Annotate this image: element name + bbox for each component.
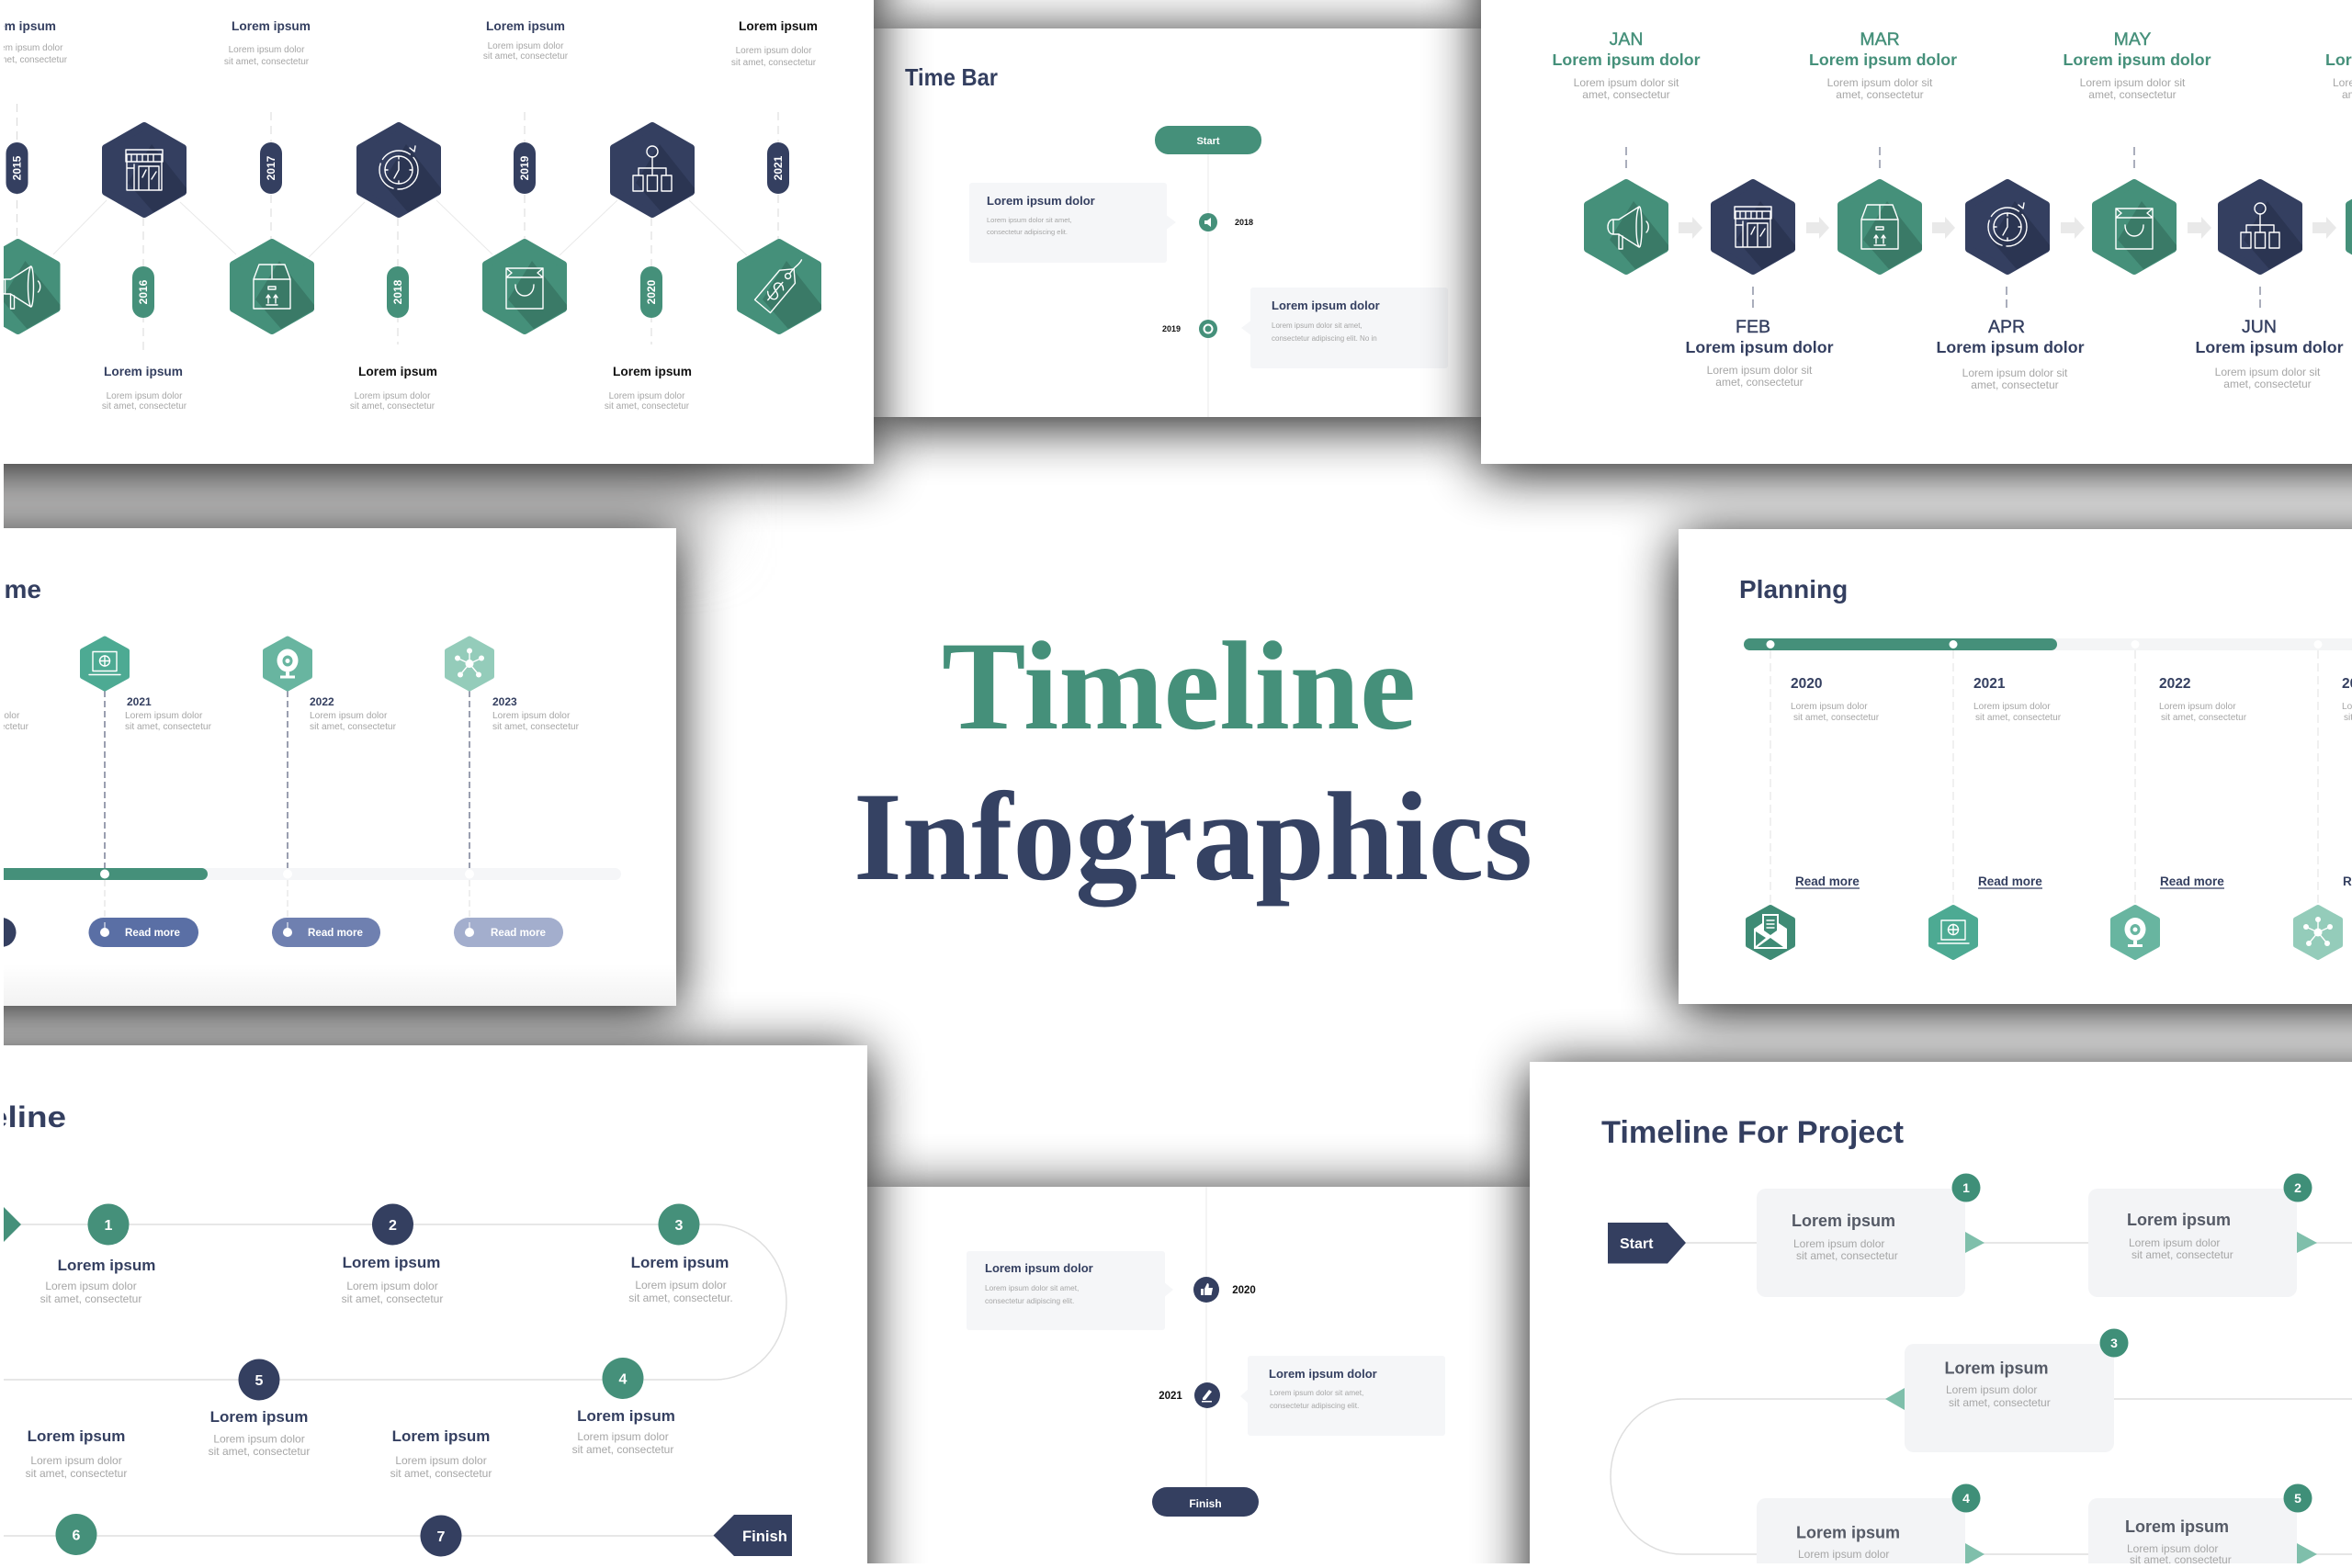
band: grey gap between top and middle slides bbox=[0, 446, 717, 548]
step 1 bbox=[40, 1203, 155, 1305]
bottom labels: Lorem ipsum bbox=[613, 365, 692, 378]
card: 2021: Lorem ipsum dolor sit amet, bbox=[1270, 1388, 1363, 1397]
step 5: sit amet, consectetur bbox=[209, 1445, 310, 1458]
hexagon: org chart bbox=[2222, 183, 2302, 271]
card 4 bbox=[1757, 1484, 1984, 1565]
panel: snake timeline bbox=[0, 1045, 867, 1563]
card 1: 1 bbox=[1962, 1180, 1970, 1195]
label: JUN bbox=[2195, 317, 2344, 390]
card: 2020: consectetur adipiscing elit. bbox=[985, 1296, 1074, 1305]
step 3: 3 bbox=[675, 1218, 684, 1234]
top labels: sit amet, consectetur bbox=[224, 57, 310, 67]
step 4: sit amet, consectetur bbox=[572, 1443, 673, 1456]
panel: monthly hexagon timeline bbox=[1481, 0, 2352, 464]
card 2 bbox=[2088, 1174, 2317, 1297]
step 6: Lorem ipsum dolor bbox=[30, 1454, 122, 1467]
column: 2021: Read more bbox=[1978, 874, 2042, 888]
card 5: Lorem ipsum bbox=[2125, 1517, 2229, 1536]
step 3: sit amet, consectetur. bbox=[628, 1292, 733, 1304]
card: 2019: Lorem ipsum dolor sit amet, bbox=[1272, 321, 1363, 330]
button: read more 2 bbox=[272, 918, 380, 947]
button: cropped bbox=[0, 918, 17, 947]
column: 2022: 2022 bbox=[2159, 676, 2190, 692]
top labels: Lorem ipsum dolor bbox=[736, 46, 812, 56]
start pill bbox=[1155, 126, 1261, 154]
progress bar bbox=[1744, 638, 2352, 650]
label: APR: Lorem ipsum dolor sit bbox=[1962, 367, 2068, 379]
card 4: Lorem ipsum dolor bbox=[1798, 1548, 1889, 1561]
panel: bottom centre slide bbox=[867, 1187, 1530, 1563]
start flag bbox=[1608, 1223, 1686, 1264]
card 2: sit amet, consectetur bbox=[2132, 1248, 2233, 1261]
top labels: Lorem ipsum dolor bbox=[229, 45, 305, 55]
column: 2020: 2020 bbox=[1791, 676, 1822, 692]
card: 2018: Lorem ipsum dolor bbox=[987, 194, 1095, 208]
step 7: 7 bbox=[437, 1529, 446, 1545]
card: 2021 bbox=[1240, 1356, 1445, 1436]
year pills: 2020 bbox=[645, 279, 658, 304]
column: 2022: Lorem ipsum dolor bbox=[2159, 702, 2236, 712]
card 3: sit amet, consectetur bbox=[1949, 1396, 2051, 1409]
bottom labels: Lorem ipsum dolor bbox=[107, 391, 183, 401]
heading: time bar: Time Bar bbox=[905, 63, 998, 91]
label: MAR: Lorem ipsum dolor sit bbox=[1827, 76, 1933, 89]
hexagon: network bbox=[447, 638, 492, 689]
label: 2021 bbox=[125, 695, 212, 732]
top labels bbox=[0, 19, 818, 68]
label: MAR: MAR bbox=[1860, 29, 1900, 50]
column: 2022: Read more bbox=[2160, 874, 2224, 888]
top labels: Lorem ipsum bbox=[739, 19, 818, 33]
card 4: 4 bbox=[1962, 1491, 1970, 1506]
card: 2020: Lorem ipsum dolor bbox=[985, 1261, 1093, 1275]
column: 2020: Lorem ipsum dolor bbox=[1791, 702, 1868, 712]
label: 2022: sit amet, consectetur bbox=[310, 722, 397, 732]
column: 2021: Lorem ipsum dolor bbox=[1973, 702, 2051, 712]
panel: planning timeline bbox=[1679, 529, 2352, 1004]
card: 2018 bbox=[969, 183, 1176, 263]
finish pill bbox=[1152, 1487, 1259, 1517]
marker: 2018 speaker bbox=[1199, 213, 1253, 231]
card 3: Lorem ipsum bbox=[1944, 1359, 2049, 1378]
step 4: Lorem ipsum bbox=[577, 1407, 675, 1425]
bottom labels: Lorem ipsum bbox=[104, 365, 183, 378]
label: APR: amet, consectetur bbox=[1971, 378, 2059, 391]
hexagon: box bbox=[1841, 183, 1922, 271]
top labels: Lorem ipsum bbox=[486, 19, 565, 33]
label: MAR: Lorem ipsum dolor bbox=[1809, 51, 1957, 69]
panel: hexagon zigzag timeline bbox=[0, 0, 874, 464]
button: read more 2: Read more bbox=[308, 927, 363, 939]
step 2: 2 bbox=[389, 1218, 397, 1234]
label: JUN: JUN bbox=[2242, 317, 2277, 337]
hexagon: store bbox=[1714, 183, 1795, 271]
hexagon: clock bbox=[1969, 183, 2050, 271]
bottom labels: sit amet, consectetur bbox=[102, 401, 187, 412]
bottom labels: sit amet, consectetur bbox=[605, 401, 690, 412]
button: read more 3: Read more bbox=[491, 927, 546, 939]
card 3: 3 bbox=[2110, 1336, 2118, 1350]
bottom labels: Lorem ipsum bbox=[358, 365, 437, 378]
label: APR: Lorem ipsum dolor bbox=[1936, 338, 2085, 356]
label: MAY: Lorem ipsum dolor bbox=[2063, 51, 2211, 69]
track bbox=[1611, 1243, 2352, 1554]
label: JAN bbox=[1552, 29, 1701, 101]
card 5: 5 bbox=[2294, 1491, 2301, 1506]
column: 2022 bbox=[2159, 676, 2247, 888]
column: 2020: sit amet, consectetur bbox=[1793, 713, 1880, 723]
title: main bbox=[854, 615, 1532, 907]
label: 2022: Lorem ipsum dolor bbox=[310, 711, 388, 721]
marker: 2018 speaker: 2018 bbox=[1235, 218, 1253, 227]
connector lines bbox=[53, 200, 747, 257]
title line: timeline: Timeline bbox=[942, 615, 1416, 756]
card: 2021: consectetur adipiscing elit. bbox=[1270, 1401, 1359, 1410]
label: 2021: 2021 bbox=[127, 695, 152, 708]
heading: planning: Planning bbox=[1739, 575, 1848, 604]
step 3: Lorem ipsum bbox=[631, 1254, 729, 1271]
track bbox=[4, 1224, 786, 1536]
card 3: Lorem ipsum dolor bbox=[1946, 1383, 2037, 1396]
label: JUN: amet, consectetur bbox=[2223, 378, 2312, 390]
step 6: 6 bbox=[73, 1529, 81, 1543]
step 6: sit amet, consectetur bbox=[26, 1467, 127, 1480]
year pills: 2017 bbox=[265, 155, 277, 180]
card 5 bbox=[2088, 1484, 2317, 1566]
column: 2020 bbox=[1791, 676, 1880, 888]
step 6 bbox=[26, 1427, 127, 1555]
hexagon: org chart bbox=[614, 126, 695, 214]
label: JAN: Lorem ipsum dolor bbox=[1552, 51, 1701, 69]
bottom labels bbox=[102, 365, 692, 412]
top labels: Lorem ipsum dolor bbox=[488, 41, 564, 51]
label: MAY: Lorem ipsum dolor sit bbox=[2080, 76, 2186, 89]
hexagon: megaphone bbox=[1588, 183, 1668, 271]
label: APR: APR bbox=[1988, 317, 2025, 337]
step 4: 4 bbox=[619, 1372, 628, 1387]
card: 2020 bbox=[967, 1251, 1173, 1330]
card: 2018: Lorem ipsum dolor sit amet, bbox=[987, 216, 1072, 224]
label: JAN: JAN bbox=[1610, 29, 1643, 50]
step 7: sit amet, consectetur bbox=[390, 1467, 492, 1480]
progress bar bbox=[4, 868, 621, 880]
title line: infographics: Infographics bbox=[854, 766, 1532, 907]
label: FEB: Lorem ipsum dolor bbox=[1685, 338, 1834, 356]
step 3 bbox=[628, 1203, 733, 1304]
step 2: Lorem ipsum bbox=[343, 1254, 440, 1271]
vertical axis bbox=[1205, 1187, 1207, 1488]
bottom labels: Lorem ipsum dolor bbox=[609, 391, 685, 401]
label: MAY: amet, consectetur bbox=[2088, 88, 2177, 101]
button: read more 3 bbox=[454, 918, 563, 947]
step 3: Lorem ipsum dolor bbox=[635, 1279, 727, 1292]
label: 2023: 2023 bbox=[492, 695, 517, 708]
finish flag bbox=[713, 1515, 792, 1556]
column: 2021: 2021 bbox=[1973, 676, 2006, 692]
shadows: front slides, upper bbox=[0, 0, 2352, 1013]
card 1: Lorem ipsum bbox=[1792, 1212, 1895, 1230]
card 3 bbox=[1885, 1328, 2128, 1452]
step 5: 5 bbox=[255, 1373, 264, 1389]
step 1: Lorem ipsum bbox=[58, 1257, 155, 1274]
column: 2021: sit amet, consectetur bbox=[1975, 713, 2062, 723]
label: MAR bbox=[1809, 29, 1957, 101]
card 5: sit amet, consectetur bbox=[2130, 1553, 2232, 1566]
hexagon: box bbox=[233, 243, 314, 331]
step 7 bbox=[390, 1427, 492, 1556]
hexagon: webcam bbox=[2113, 908, 2157, 957]
step 2: Lorem ipsum dolor bbox=[346, 1280, 438, 1292]
label: 2022 bbox=[310, 695, 397, 732]
label: 2023 bbox=[492, 695, 580, 732]
shadow: snake slide bbox=[0, 1053, 867, 1558]
label: 2023: Lorem ipsum dolor bbox=[492, 711, 571, 721]
label: FEB bbox=[1685, 317, 1834, 389]
step 1: sit amet, consectetur bbox=[40, 1292, 141, 1305]
button: read more 1: Read more bbox=[125, 927, 180, 939]
dashed guides bbox=[1626, 147, 2260, 310]
vertical axis bbox=[1207, 154, 1209, 417]
bottom labels: Lorem ipsum dolor bbox=[355, 391, 431, 401]
hexagon: laptop bbox=[83, 638, 127, 689]
dashed guides bbox=[1770, 650, 2318, 905]
card 1: Lorem ipsum dolor bbox=[1793, 1237, 1884, 1250]
column: 2023 bbox=[2342, 676, 2352, 888]
button: read more 1 bbox=[88, 918, 198, 947]
shadow: rear slide top bbox=[874, 36, 1481, 424]
hexagon: clock bbox=[360, 126, 441, 214]
step 2: sit amet, consectetur bbox=[342, 1292, 443, 1305]
marker: 2021 pen: 2021 bbox=[1159, 1391, 1182, 1402]
card 2: Lorem ipsum bbox=[2127, 1211, 2231, 1229]
label: 2023: sit amet, consectetur bbox=[492, 722, 580, 732]
panel: timeline for project bbox=[1530, 1062, 2352, 1566]
column: 2021 bbox=[1973, 676, 2062, 888]
hexagon: bag bbox=[486, 243, 567, 331]
arrows between hexagons bbox=[1679, 217, 2336, 239]
marker: 2019 gear: 2019 bbox=[1162, 324, 1181, 333]
hexagon: laptop bbox=[1931, 908, 1975, 957]
step 5: Lorem ipsum dolor bbox=[213, 1433, 305, 1446]
label: JAN: amet, consectetur bbox=[1582, 88, 1670, 101]
card: 2021: Lorem ipsum dolor bbox=[1269, 1367, 1377, 1381]
label: 2021: sit amet, consectetur bbox=[125, 722, 212, 732]
top labels: sit amet, consectetur bbox=[731, 58, 817, 68]
dashed guides bbox=[105, 691, 469, 868]
label: JUN: Lorem ipsum dolor bbox=[2195, 338, 2344, 356]
top labels: sit amet, consectetur bbox=[483, 51, 569, 62]
step 4: Lorem ipsum dolor bbox=[577, 1430, 669, 1443]
hexagon: price tag bbox=[741, 243, 821, 331]
finish flag: Finish bbox=[742, 1528, 787, 1545]
card 2: Lorem ipsum dolor bbox=[2129, 1236, 2220, 1249]
shadow: rear slide bottom bbox=[867, 1194, 1530, 1562]
year pills bbox=[6, 142, 789, 318]
step 6: Lorem ipsum bbox=[28, 1427, 125, 1445]
card: 2019: consectetur adipiscing elit. No in bbox=[1272, 334, 1377, 343]
marker: 2020 thumbs up bbox=[1193, 1277, 1256, 1303]
year pills: 2018 bbox=[391, 279, 404, 304]
step 7: Lorem ipsum dolor bbox=[395, 1454, 487, 1467]
marker: 2019 gear bbox=[1162, 320, 1217, 338]
step 1: 1 bbox=[105, 1218, 113, 1234]
step 2 bbox=[342, 1203, 443, 1305]
top labels: Lorem ipsum bbox=[232, 19, 311, 33]
label: 2021: Lorem ipsum dolor bbox=[125, 711, 203, 721]
panel: progress timeline left bbox=[0, 528, 676, 1006]
card: 2018: consectetur adipiscing elit. bbox=[987, 228, 1068, 236]
hexagon: partly visible bbox=[2349, 183, 2352, 271]
step 7: Lorem ipsum bbox=[392, 1427, 490, 1445]
year pills: 2019 bbox=[518, 155, 531, 180]
hexagon: megaphone bbox=[0, 243, 61, 331]
panel: time bar slide bbox=[874, 28, 1481, 417]
hexagon: bag bbox=[2096, 183, 2177, 271]
label: FEB: FEB bbox=[1736, 317, 1770, 337]
label: JAN: Lorem ipsum dolor sit bbox=[1574, 76, 1679, 89]
hexagon: network bbox=[2295, 908, 2341, 957]
card: 2019 bbox=[1241, 288, 1448, 368]
card 2: 2 bbox=[2294, 1180, 2301, 1195]
hexagon: webcam bbox=[265, 638, 311, 689]
heading: timeline for project: Timeline For Project bbox=[1601, 1115, 1904, 1150]
marker: 2020 thumbs up: 2020 bbox=[1232, 1285, 1256, 1296]
bottom labels: sit amet, consectetur bbox=[350, 401, 435, 412]
start pill: Start bbox=[1196, 136, 1220, 147]
step 5 bbox=[209, 1359, 310, 1458]
year pills: 2021 bbox=[772, 155, 785, 180]
label: FEB: Lorem ipsum dolor sit bbox=[1707, 364, 1813, 377]
shadow: project slide bbox=[1530, 1069, 2352, 1556]
marker: 2021 pen bbox=[1159, 1382, 1220, 1408]
card 4: Lorem ipsum bbox=[1796, 1523, 1900, 1541]
start arrow bbox=[4, 1207, 21, 1242]
hexagon: store bbox=[106, 126, 187, 214]
card 1 bbox=[1757, 1174, 1984, 1297]
card: 2019: Lorem ipsum dolor bbox=[1272, 299, 1380, 312]
step 5: Lorem ipsum bbox=[210, 1408, 308, 1426]
card 1: sit amet, consectetur bbox=[1796, 1249, 1898, 1262]
label: cropped bbox=[0, 711, 29, 732]
step 1: Lorem ipsum dolor bbox=[45, 1280, 137, 1292]
column: 2022: sit amet, consectetur bbox=[2161, 713, 2247, 723]
label: MAY: MAY bbox=[2114, 29, 2151, 50]
hexagon: envelope bbox=[1747, 908, 1793, 957]
label: MAY bbox=[2063, 29, 2211, 101]
card: 2020: Lorem ipsum dolor sit amet, bbox=[985, 1283, 1079, 1292]
dashed guides bbox=[17, 104, 778, 354]
year pills: 2016 bbox=[137, 279, 150, 304]
column: 2020: Read more bbox=[1795, 874, 1860, 888]
year pills: 2015 bbox=[11, 155, 24, 180]
step 4 bbox=[572, 1358, 675, 1456]
label: FEB: amet, consectetur bbox=[1715, 376, 1804, 389]
card 5: Lorem ipsum dolor bbox=[2127, 1542, 2218, 1555]
finish pill: Finish bbox=[1189, 1497, 1222, 1510]
label: APR bbox=[1936, 317, 2085, 391]
start flag: Start bbox=[1620, 1236, 1654, 1252]
label: 2022: 2022 bbox=[310, 695, 334, 708]
label: JUN: Lorem ipsum dolor sit bbox=[2215, 366, 2321, 378]
label: cropped right bbox=[2325, 51, 2352, 101]
label: MAR: amet, consectetur bbox=[1836, 88, 1924, 101]
